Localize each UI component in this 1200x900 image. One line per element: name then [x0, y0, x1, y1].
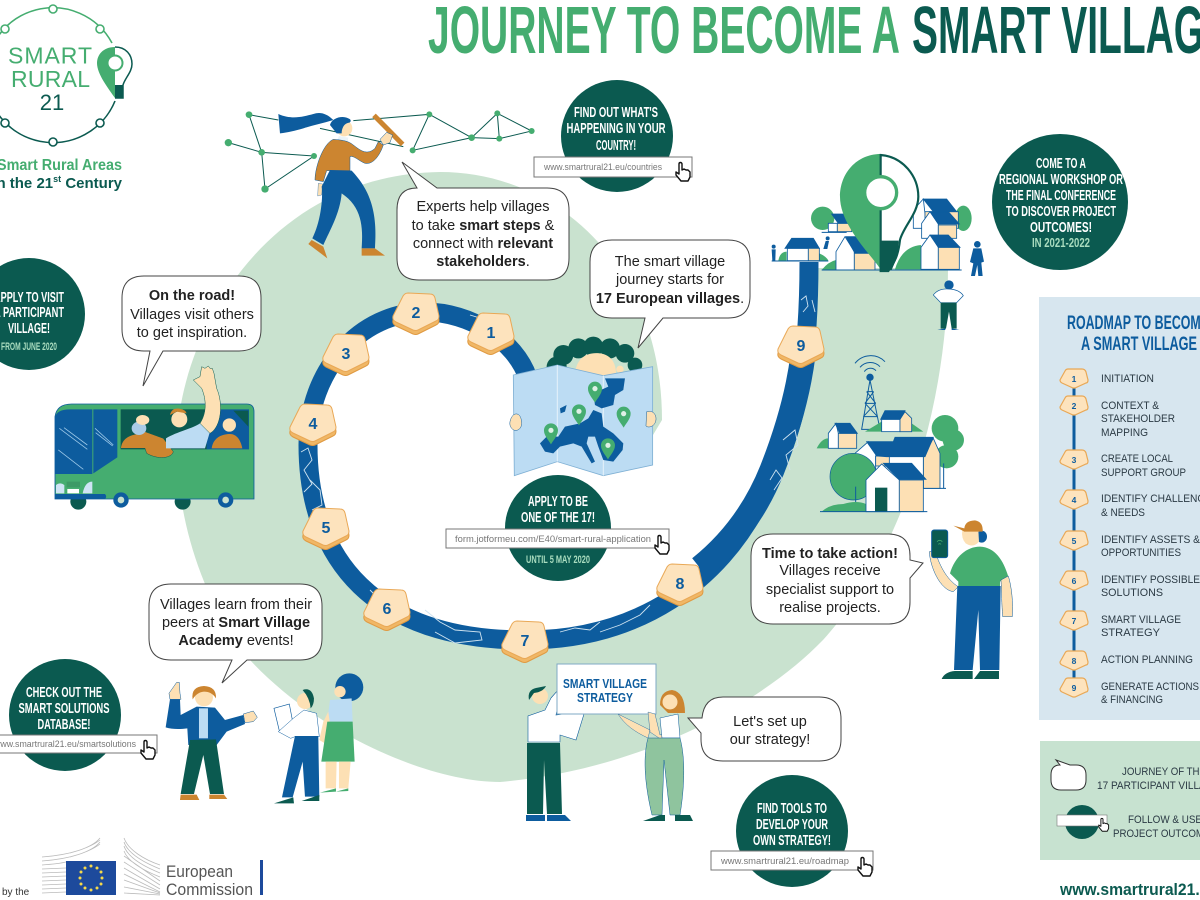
callout: smart solutions database: CHECK OUT THE	[26, 685, 102, 701]
callout: find out what's happening: www.smartrural21.eu/countries	[543, 162, 662, 173]
bubble: let's set up: Let's set up	[733, 714, 807, 730]
roadmap steps: 4	[1072, 495, 1077, 505]
funded by the European Commission logo: by the	[2, 887, 30, 898]
callout: regional workshop: TO DISCOVER PROJECT	[1006, 204, 1116, 220]
callout: apply to be one of the 17	[446, 475, 669, 581]
bubble: villages learn: peers at Smart Village	[162, 615, 310, 631]
logo: Smart Rural 21: Smart Rural Areas	[0, 157, 122, 174]
bubble: time to take action: specialist support to	[766, 582, 894, 598]
roadmap steps: & NEEDS	[1101, 507, 1145, 519]
roadmap steps: CREATE LOCAL	[1101, 453, 1173, 465]
callout: apply to be one of the 17: form.jotformeu.com/E40/smart-rural-application	[455, 534, 651, 545]
callout: apply to be one of the 17: APPLY TO BE	[528, 494, 588, 510]
roadmap steps	[1060, 369, 1200, 706]
callout: smart solutions database	[0, 659, 157, 771]
callout: apply to visit: VILLAGE!	[8, 321, 50, 337]
roadmap steps: SMART VILLAGE	[1101, 614, 1181, 626]
bubble: let's set up: our strategy!	[730, 732, 810, 748]
stage markers 1 to 9: 7	[521, 633, 530, 650]
callout: find tools: OWN STRATEGY!	[753, 833, 831, 849]
illustration: big pin and top village	[772, 154, 972, 271]
stage markers 1 to 9: 6	[383, 601, 392, 618]
bubble: experts: to take smart steps &	[412, 218, 555, 234]
bubble: villages learn: Villages learn from their	[160, 597, 312, 613]
bubble: journey starts: 17 European villages.	[596, 291, 744, 307]
illustration: man with phone	[929, 520, 1013, 679]
roadmap steps: 9	[1072, 683, 1077, 693]
bubble: experts: connect with relevant	[413, 236, 553, 252]
roadmap steps: & FINANCING	[1101, 694, 1163, 706]
logo: Smart Rural 21: SMART	[8, 42, 92, 68]
callout: regional workshop: COME TO A	[1036, 156, 1086, 172]
bubble: on the road: Villages visit others	[130, 307, 254, 323]
illustration: bus with villagers	[55, 366, 254, 510]
callout: regional workshop: IN 2021-2022	[1032, 235, 1090, 250]
roadmap steps: 7	[1072, 616, 1077, 626]
stage markers 1 to 9: 3	[342, 346, 351, 363]
illustration: smart village strategy sign and two people	[526, 664, 693, 821]
bubble: journey starts: journey starts for	[615, 272, 724, 288]
illustration: smart village strategy sign and two people: STRATEGY	[577, 690, 633, 705]
logo: Smart Rural 21: Century	[61, 175, 123, 192]
figures near top village	[772, 236, 984, 330]
roadmap steps: 6	[1072, 576, 1077, 586]
bubble: time to take action: realise projects.	[779, 600, 881, 616]
bubble: on the road: to get inspiration.	[137, 325, 247, 341]
callout: apply to visit: FROM JUNE 2020	[1, 341, 57, 353]
road: spiral journey path	[301, 262, 815, 643]
callout: smart solutions database: DATABASE!	[38, 717, 90, 733]
green spiral background	[177, 172, 948, 782]
callout: find tools: FIND TOOLS TO	[757, 801, 827, 817]
roadmap steps: 1	[1072, 374, 1077, 384]
roadmap steps: MAPPING	[1101, 427, 1148, 439]
bubble: experts	[397, 162, 569, 280]
callout: find out what's happening: HAPPENING IN YOUR	[566, 121, 666, 137]
callout: find tools	[711, 775, 873, 887]
callout: regional workshop	[992, 134, 1128, 270]
roadmap steps: 5	[1072, 536, 1077, 546]
bubble: experts: Experts help villages	[416, 199, 550, 215]
legend: circle and link icon	[1057, 805, 1109, 839]
bubble: journey starts: The smart village	[615, 254, 725, 270]
bubble: villages learn	[149, 584, 322, 683]
bubble: experts: stakeholders.	[436, 254, 530, 270]
bubble: let's set up	[688, 697, 841, 761]
stage markers 1 to 9: 9	[797, 338, 806, 355]
callout: smart solutions database: SMART SOLUTIONS	[18, 701, 110, 717]
callout: regional workshop: REGIONAL WORKSHOP OR	[999, 172, 1123, 188]
funded by the European Commission logo: Commission	[166, 881, 253, 899]
roadmap steps: ACTION PLANNING	[1101, 654, 1193, 666]
illustration: tower and lower village	[817, 356, 964, 512]
funded by the European Commission logo: European	[166, 863, 233, 881]
panel: roadmap	[1039, 297, 1200, 720]
roadmap steps: CONTEXT &	[1101, 400, 1160, 412]
illustration: academy presenter	[166, 682, 257, 800]
roadmap steps: INITIATION	[1101, 373, 1154, 385]
stage markers 1 to 9: 1	[487, 325, 496, 342]
bubble: on the road: On the road!	[149, 288, 235, 304]
illustration: smart village strategy sign and two people: SMART VILLAGE	[563, 676, 647, 691]
roadmap heading	[1067, 312, 1200, 355]
callout: apply to be one of the 17: ONE OF THE 17!	[521, 510, 595, 526]
roadmap steps: STAKEHOLDER	[1101, 413, 1175, 425]
bubble: journey starts	[590, 240, 750, 348]
stage markers 1 to 9: 4	[309, 416, 318, 433]
illustration: two listeners	[274, 673, 363, 803]
legend: bubble icon	[1051, 760, 1086, 790]
logo: Smart Rural 21: 21	[40, 90, 64, 115]
roadmap steps: 8	[1072, 656, 1077, 666]
callout: find out what's happening: COUNTRY!	[596, 138, 636, 154]
bubble: time to take action: Time to take action!	[762, 546, 898, 562]
callout: find tools: DEVELOP YOUR	[756, 817, 828, 833]
stage markers 1 to 9	[290, 293, 824, 662]
illustration: woman drawing network	[225, 110, 535, 258]
callout: regional workshop: THE FINAL CONFERENCE	[1006, 188, 1116, 204]
roadmap steps: 3	[1072, 455, 1077, 465]
logo: Smart Rural 21	[0, 5, 132, 192]
roadmap steps: STRATEGY	[1101, 627, 1161, 639]
bubble: villages learn: Academy events!	[178, 633, 294, 649]
stage markers 1 to 9: 2	[412, 305, 421, 322]
roadmap steps: SUPPORT GROUP	[1101, 467, 1186, 479]
illustration: person reading map of Europe	[510, 337, 656, 476]
roadmap steps: SOLUTIONS	[1101, 587, 1163, 599]
logo: Smart Rural 21: st	[53, 174, 61, 184]
panel: legend	[1040, 741, 1200, 860]
stage markers 1 to 9: 8	[676, 576, 685, 593]
roadmap steps: OPPORTUNITIES	[1101, 547, 1181, 559]
callout: find tools: www.smartrural21.eu/roadmap	[720, 856, 849, 867]
roadmap steps: 2	[1072, 401, 1077, 411]
funded by the European Commission logo	[2, 838, 263, 899]
logo: Smart Rural 21: RURAL	[11, 66, 90, 92]
callout: find out what's happening: FIND OUT WHAT'S	[574, 105, 658, 121]
stage markers 1 to 9: 5	[322, 520, 331, 537]
bubble: time to take action	[751, 534, 923, 624]
callout: apply to be one of the 17: UNTIL 5 MAY 2020	[526, 554, 590, 566]
callout: find out what's happening	[534, 80, 692, 192]
bubble: on the road	[122, 276, 261, 386]
callout: regional workshop: OUTCOMES!	[1030, 220, 1092, 236]
bubble: time to take action: Villages receive	[779, 563, 881, 579]
callout: apply to visit	[0, 258, 85, 370]
